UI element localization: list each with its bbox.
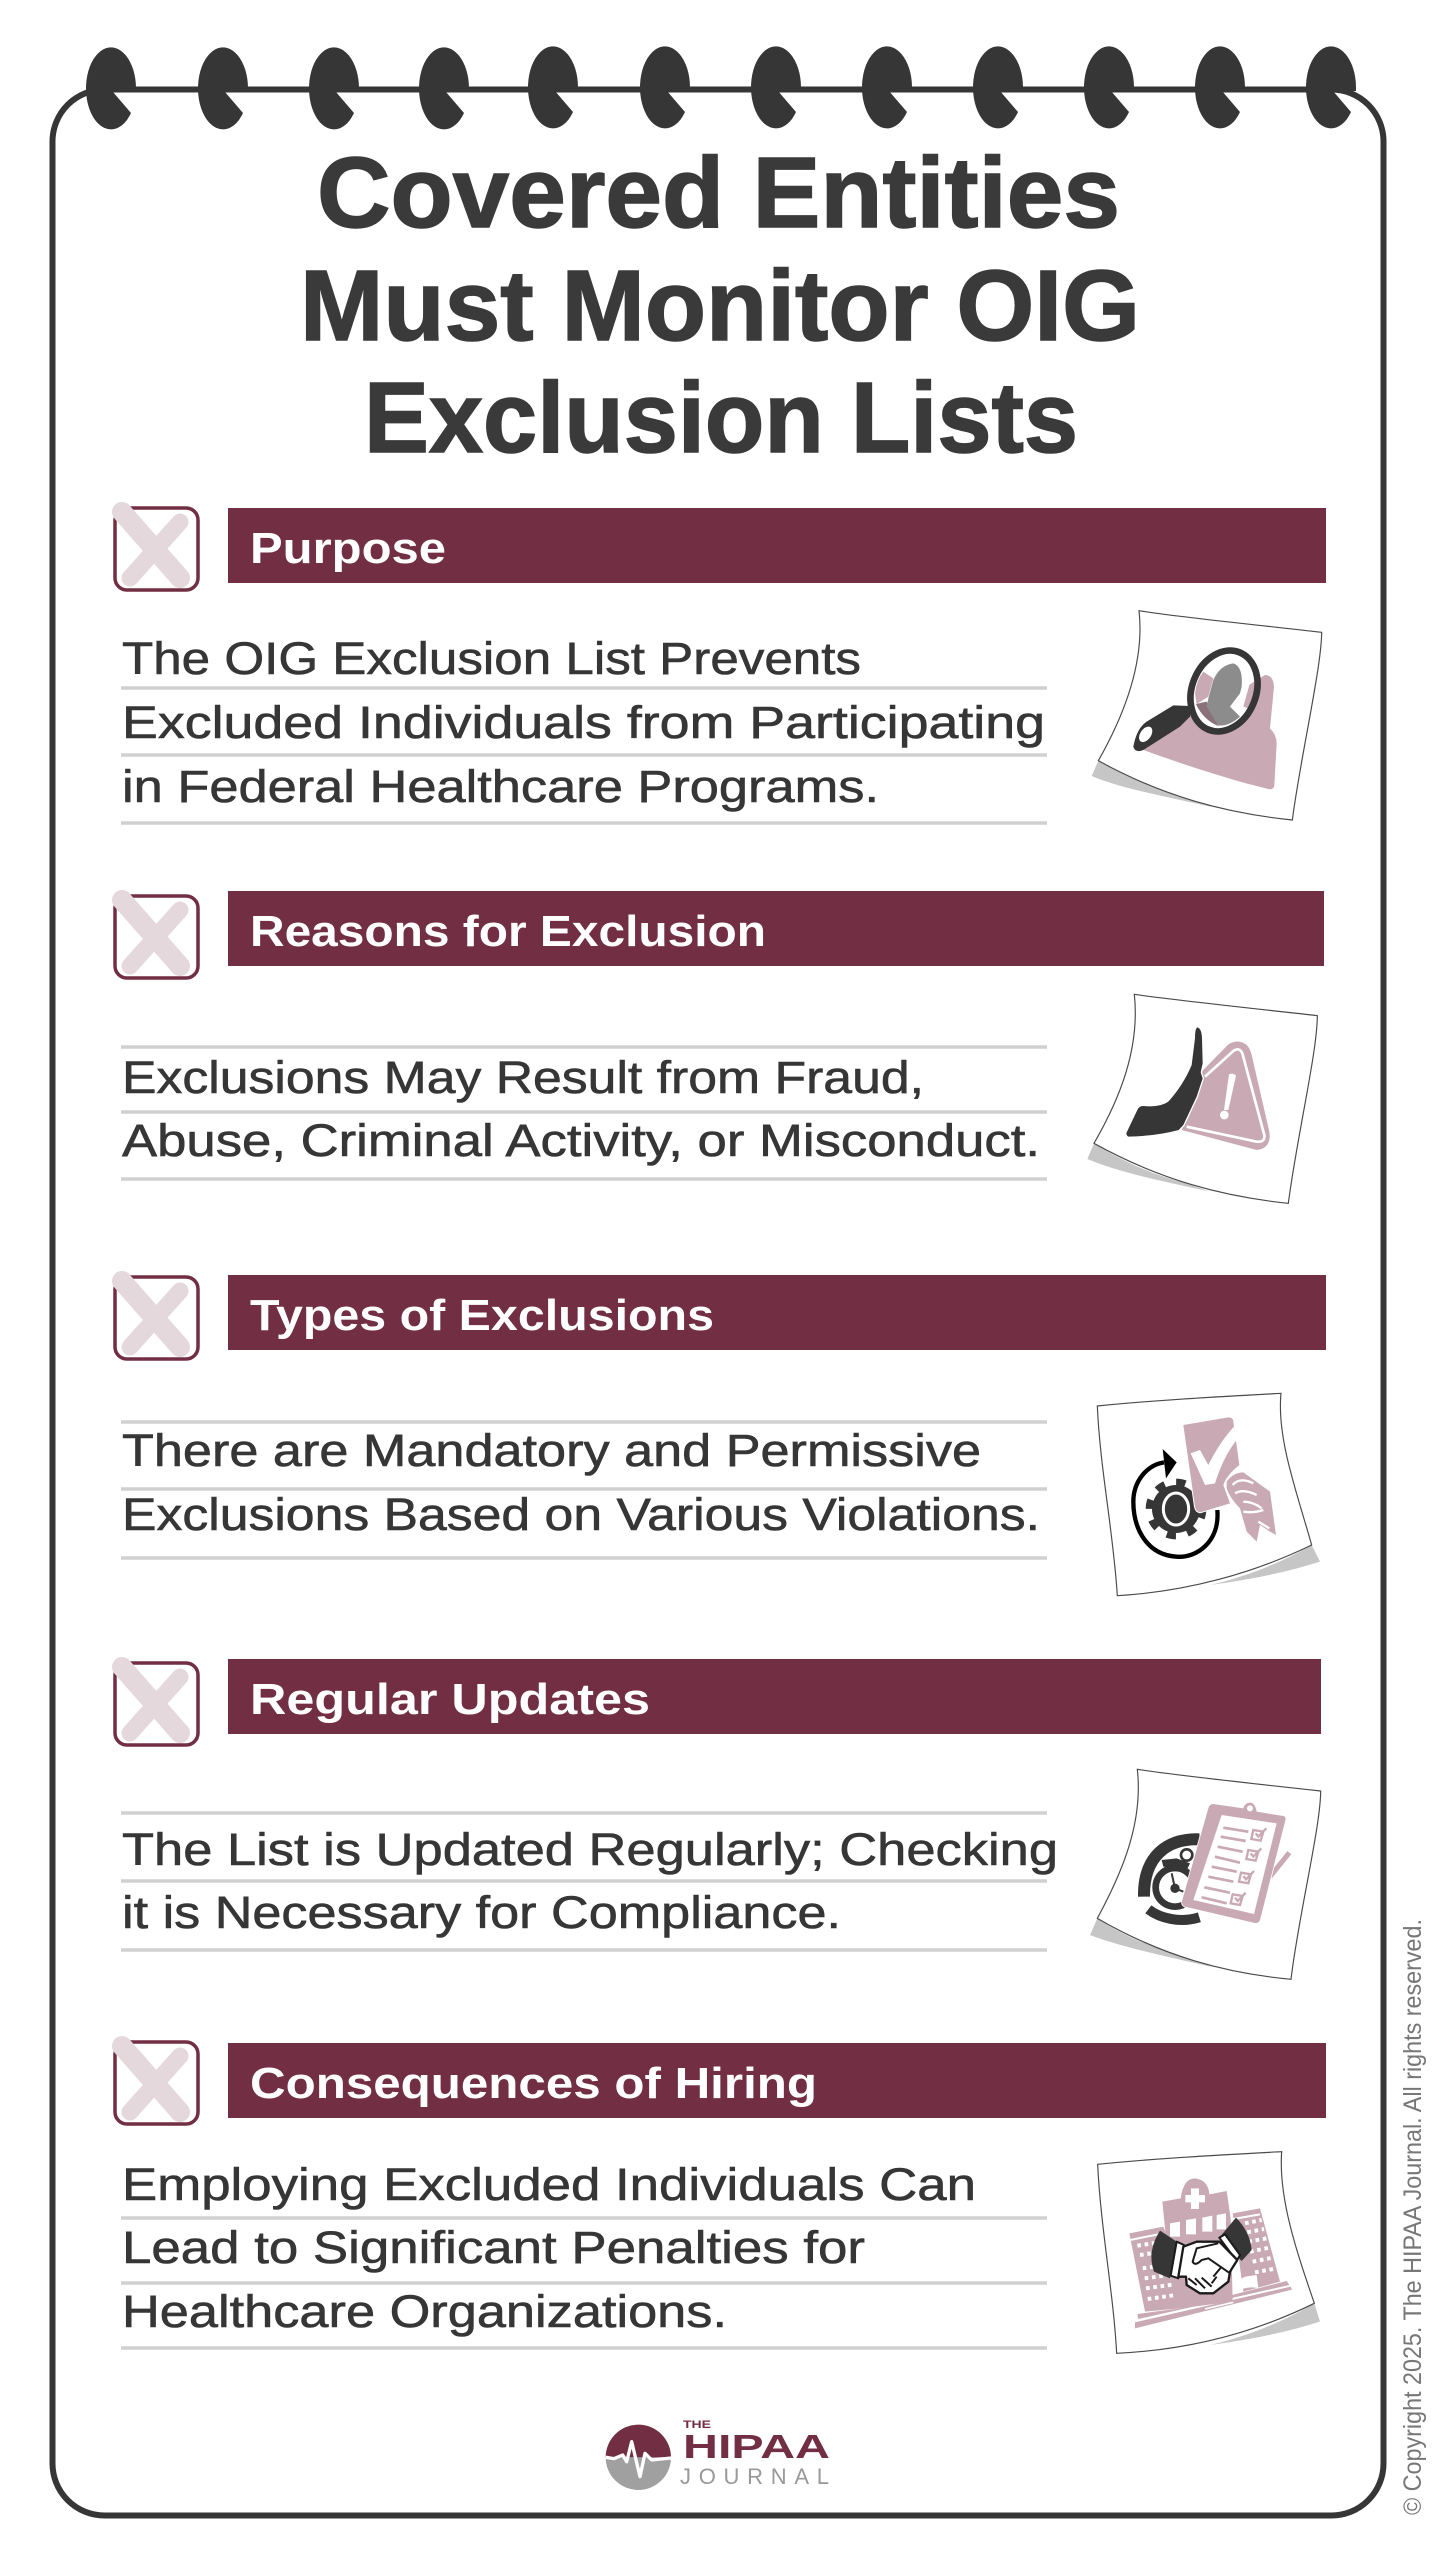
text block: it is Necessary for Compliance. xyxy=(122,1887,841,1938)
text block xyxy=(121,2159,1047,2348)
logo: The HIPAA Journal: JOURNAL xyxy=(680,2464,829,2489)
header bar: Types of Exclusions xyxy=(250,1291,714,1340)
icon: stop hand and warning triangle xyxy=(1087,994,1317,1203)
header bar: Purpose xyxy=(250,524,446,573)
checkbox icon xyxy=(115,1663,198,1745)
panel: reasons for exclusion xyxy=(115,891,1324,1203)
logo mark xyxy=(606,2425,671,2490)
text block xyxy=(121,1422,1047,1558)
text block: There are Mandatory and Permissive xyxy=(122,1425,981,1476)
text block: The OIG Exclusion List Prevents xyxy=(122,633,861,684)
text block: Exclusions Based on Various Violations. xyxy=(122,1489,1040,1540)
title: Exclusion Lists xyxy=(364,362,1078,474)
title: Must Monitor OIG xyxy=(300,250,1140,362)
text block xyxy=(121,1813,1058,1950)
text block: Lead to Significant Penalties for xyxy=(122,2222,865,2273)
header bar: Regular Updates xyxy=(250,1675,650,1724)
text block: Exclusions May Result from Fraud, xyxy=(122,1052,924,1103)
logo: The HIPAA Journal: HIPAA xyxy=(683,2428,830,2465)
text block: in Federal Healthcare Programs. xyxy=(122,761,879,812)
checkbox icon xyxy=(115,2042,198,2124)
checkbox icon xyxy=(115,896,198,978)
checkbox icon xyxy=(115,1277,198,1359)
checkbox icon xyxy=(115,508,198,590)
header bar xyxy=(228,2043,1326,2118)
logo: The HIPAA Journal: THE xyxy=(683,2419,711,2431)
text block: Excluded Individuals from Participating xyxy=(122,697,1045,748)
text block xyxy=(121,633,1047,823)
header bar xyxy=(228,1659,1321,1734)
title xyxy=(300,137,1140,474)
header bar xyxy=(228,508,1326,583)
icon: magnifying glass over person xyxy=(1092,611,1322,820)
icon: hospital and handshake xyxy=(1098,2152,1320,2353)
panel: types of exclusions xyxy=(115,1275,1326,1596)
panel: regular updates xyxy=(115,1659,1321,1979)
panel: purpose xyxy=(115,508,1326,823)
text block xyxy=(121,1047,1047,1179)
text block: Abuse, Criminal Activity, or Misconduct. xyxy=(122,1115,1040,1166)
header bar xyxy=(228,1275,1326,1350)
copyright note: © Copyright 2025. The HIPAA Journal. All rights reserved. xyxy=(1399,1919,1427,2515)
text block: The List is Updated Regularly; Checking xyxy=(122,1824,1058,1875)
header bar: Reasons for Exclusion xyxy=(250,907,766,956)
logo: The HIPAA Journal xyxy=(606,2419,830,2490)
text block: Healthcare Organizations. xyxy=(122,2286,727,2337)
icon: gear cycle and approval card xyxy=(1097,1393,1320,1596)
title: Covered Entities xyxy=(317,137,1120,249)
icon: stopwatch and checklist clipboard xyxy=(1090,1769,1321,1979)
panel: consequences of hiring xyxy=(115,2042,1326,2353)
spiral binding rings xyxy=(86,46,1356,129)
header bar: Consequences of Hiring xyxy=(250,2059,817,2108)
text block: Employing Excluded Individuals Can xyxy=(122,2159,976,2210)
header bar xyxy=(228,891,1324,966)
